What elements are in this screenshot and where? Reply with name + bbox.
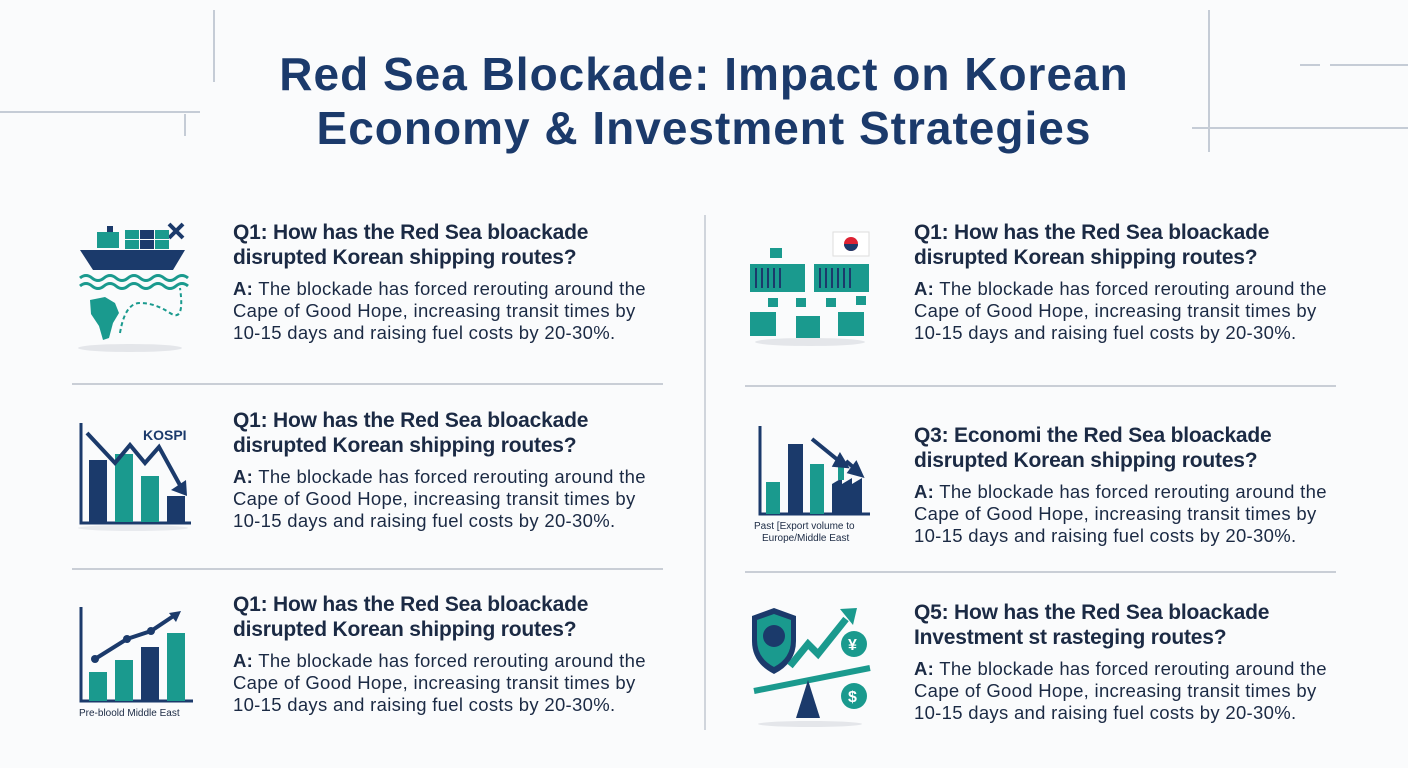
Q&A left 2 [233,409,646,531]
decorative frame lines [0,10,1408,152]
icon: ship rerouting [78,222,189,352]
vertical divider [704,215,706,730]
Q&A right 2: 10-15 days and raising fuel costs by 20-30%. [914,525,1296,546]
Q&A left 1: Q1: How has the Red Sea bloackade [233,221,588,244]
icon: KOSPI chart [78,423,191,531]
icon: investment shield & scale: ¥ [848,637,857,654]
title: Economy & Investment Strategies [317,102,1091,154]
Q&A right 3: A: The blockade has forced rerouting around the [914,658,1327,679]
Q&A right 3: Investment st rasteging routes? [914,626,1226,649]
Q&A left 2: A: The blockade has forced rerouting around the [233,466,646,487]
Q&A left 2: Q1: How has the Red Sea bloackade [233,409,588,432]
Q&A left 3: 10-15 days and raising fuel costs by 20-30%. [233,694,615,715]
icon: investment shield & scale [752,608,871,727]
Q&A left 2: 10-15 days and raising fuel costs by 20-30%. [233,510,615,531]
Q&A left 1: disrupted Korean shipping routes? [233,246,576,269]
icon: rising chart [79,607,193,719]
Q&A left 3: disrupted Korean shipping routes? [233,618,576,641]
Q&A right 2: A: The blockade has forced rerouting around the [914,481,1327,502]
Q&A left 3: A: The blockade has forced rerouting around the [233,650,646,671]
Q&A right 1 [914,221,1327,343]
Q&A right 3: 10-15 days and raising fuel costs by 20-30%. [914,702,1296,723]
Q&A left 1: 10-15 days and raising fuel costs by 20-30%. [233,322,615,343]
Q&A right 1: Cape of Good Hope, increasing transit times by [914,300,1316,321]
Q&A right 2: disrupted Korean shipping routes? [914,449,1257,472]
title: Red Sea Blockade: Impact on Korean [279,48,1129,100]
icon: export decline factory [754,426,870,544]
Q&A right 1: disrupted Korean shipping routes? [914,246,1257,269]
Q&A left 1 [233,221,646,343]
icon: investment shield & scale: $ [848,689,857,706]
Q&A right 1: Q1: How has the Red Sea bloackade [914,221,1269,244]
icon: export decline factory: Past [Export volume to [754,521,855,532]
Q&A left 2: disrupted Korean shipping routes? [233,434,576,457]
Q&A left 1: A: The blockade has forced rerouting around the [233,278,646,299]
Q&A right 2 [914,424,1327,546]
Q&A right 2: Cape of Good Hope, increasing transit times by [914,503,1316,524]
icon: export decline factory: Europe/Middle East [762,533,849,544]
title [279,48,1129,154]
Q&A left 3 [233,593,646,715]
Q&A right 2: Q3: Economi the Red Sea bloackade [914,424,1272,447]
icon: KOSPI chart: KOSPI [143,427,187,443]
icon: rising chart: Pre-bloold Middle East [79,708,180,719]
Q&A right 3: Q5: How has the Red Sea bloackade [914,601,1269,624]
Q&A left 1: Cape of Good Hope, increasing transit times by [233,300,636,321]
Q&A right 1: A: The blockade has forced rerouting around the [914,278,1327,299]
Q&A left 2: Cape of Good Hope, increasing transit times by [233,488,636,509]
icon: broken container with Korean flag [750,232,870,346]
Q&A right 3: Cape of Good Hope, increasing transit times by [914,680,1316,701]
Q&A right 3 [914,601,1327,723]
Q&A left 3: Cape of Good Hope, increasing transit times by [233,672,636,693]
Q&A right 1: 10-15 days and raising fuel costs by 20-30%. [914,322,1296,343]
Q&A left 3: Q1: How has the Red Sea bloackade [233,593,588,616]
